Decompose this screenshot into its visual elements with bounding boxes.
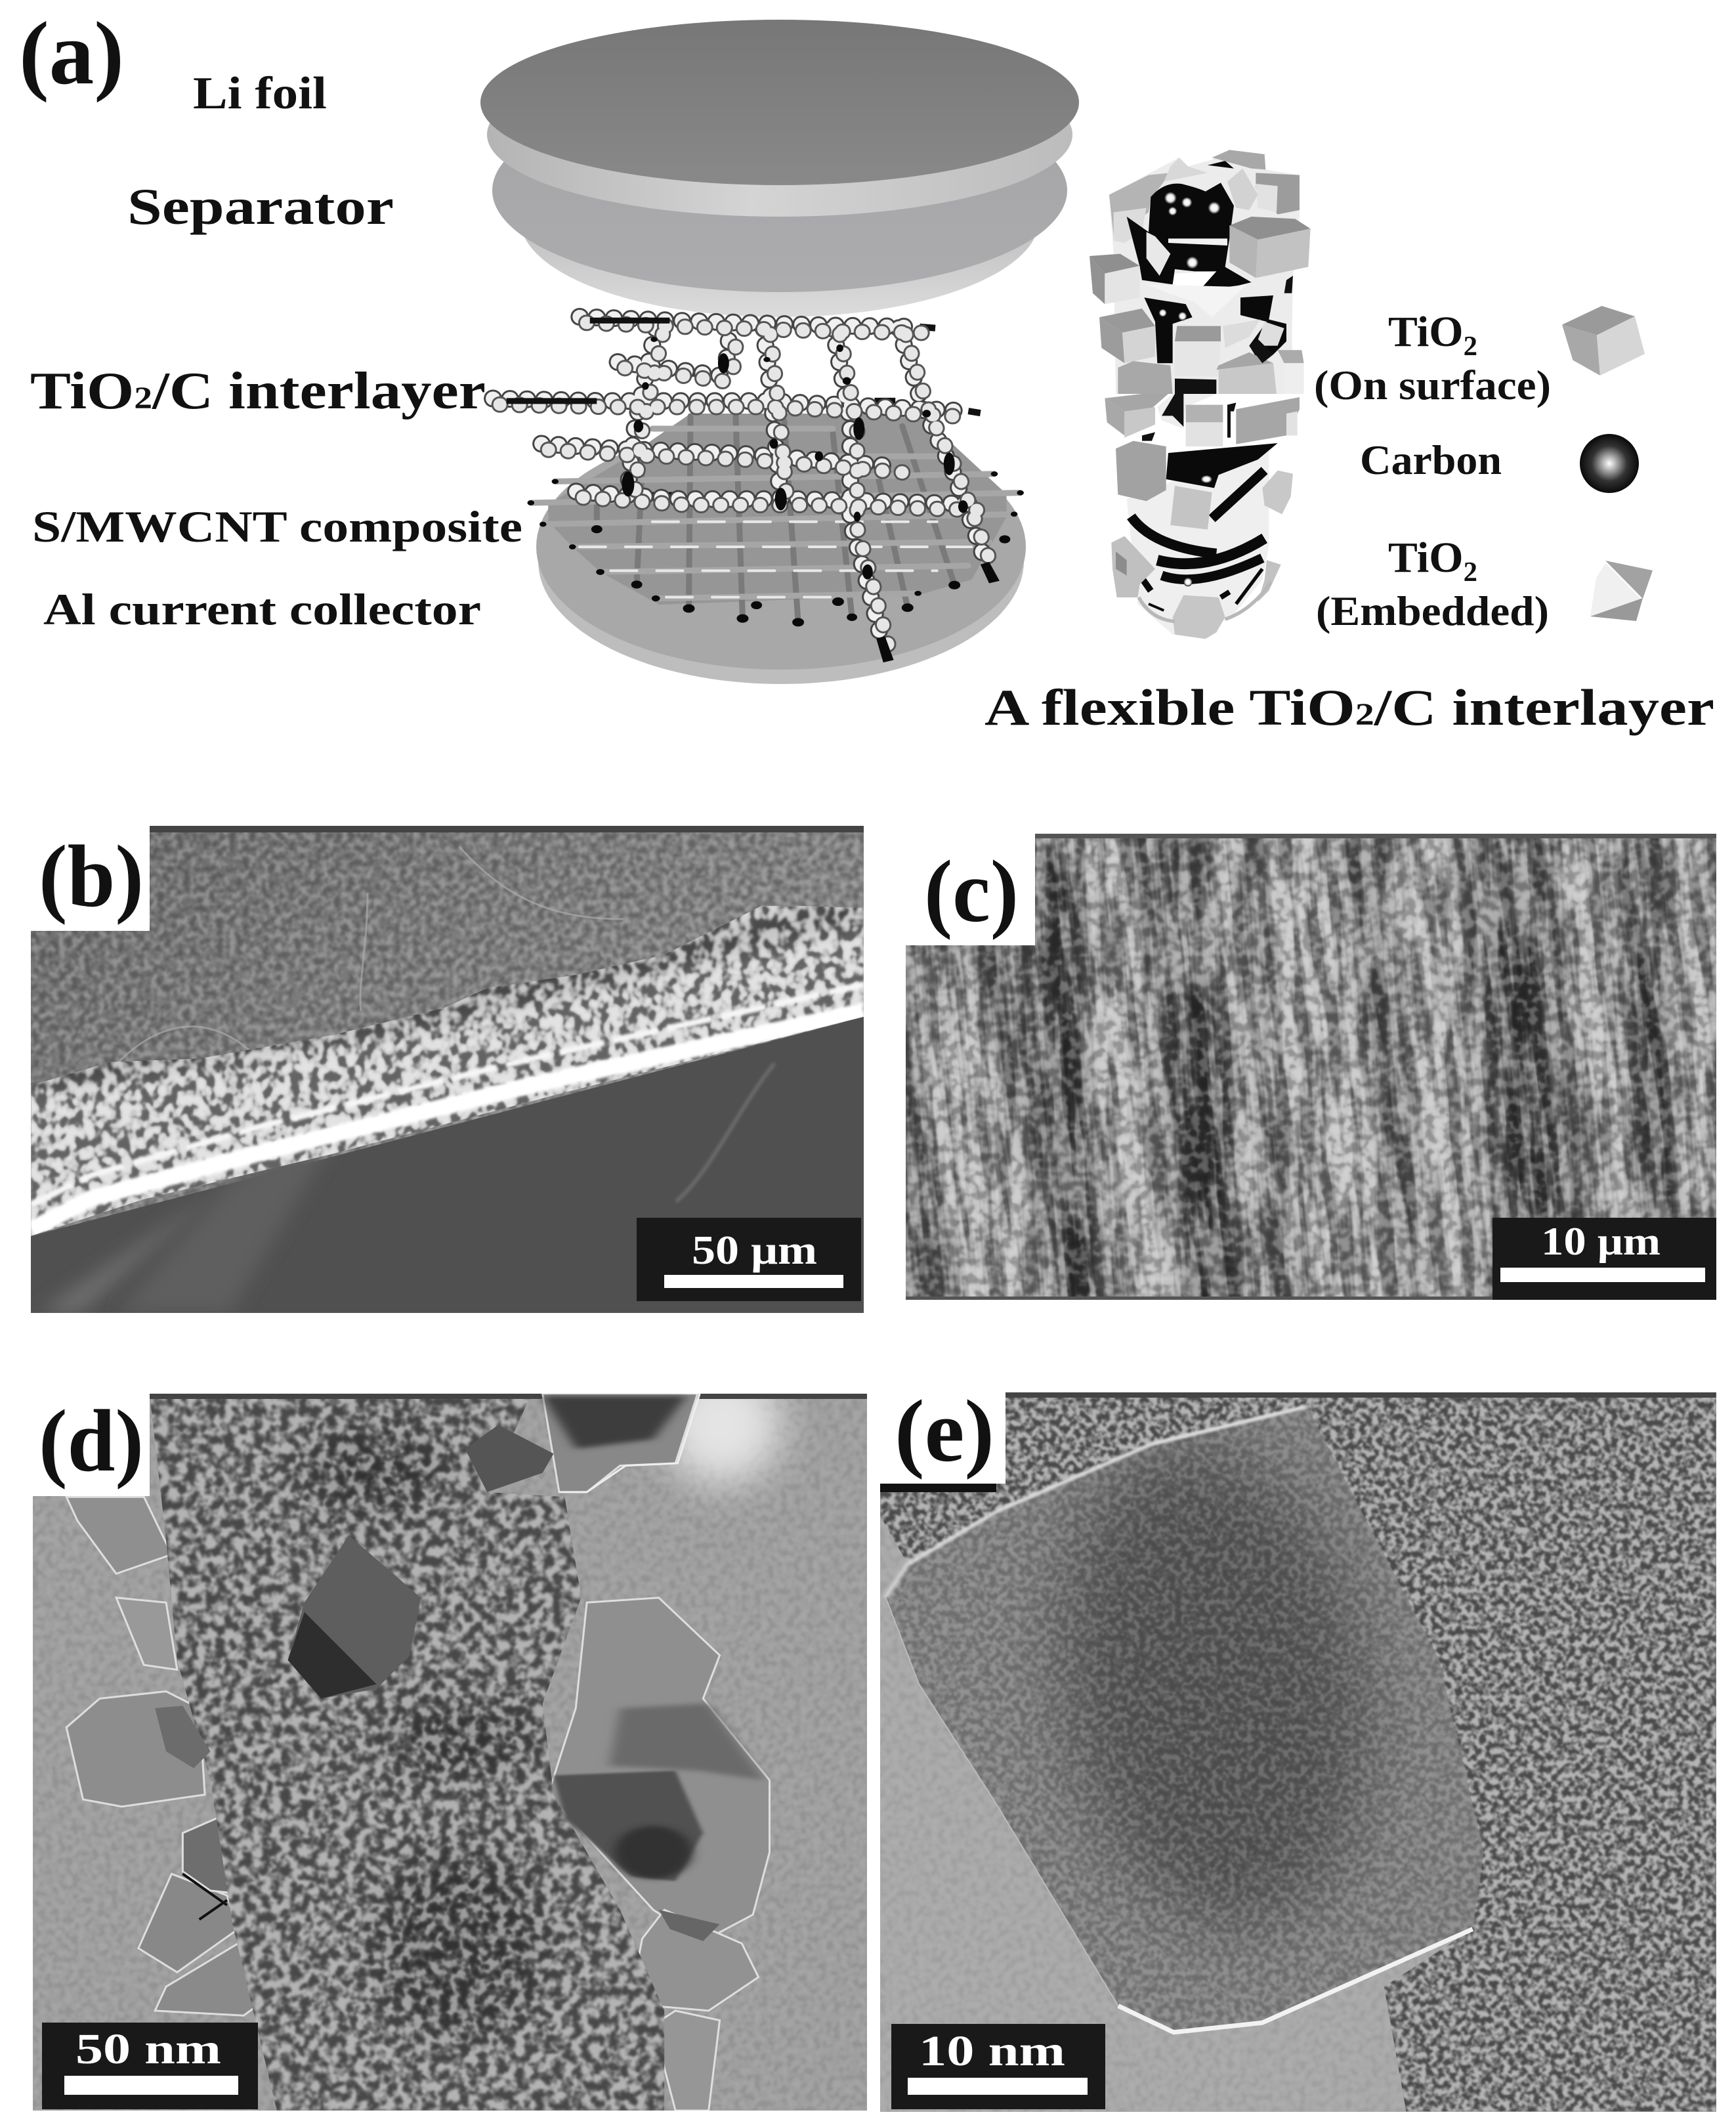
label: Al current collector: Al current collector: [43, 584, 481, 634]
legend: Carbon: Carbon: [1360, 437, 1502, 483]
scale bar: 50 um: 50 μm: [692, 1228, 817, 1273]
separator and Li foil discs: [480, 20, 1079, 317]
S/MWCNT mesh: [527, 414, 1024, 626]
fibre lower section: [1105, 394, 1300, 639]
legend: TiO2 on surface: (On surface): [1314, 362, 1551, 408]
label: S/MWCNT composite: S/MWCNT composite: [32, 502, 522, 551]
scale bar: 10 nm: 10 nm: [919, 2027, 1065, 2075]
label: Li foil: Li foil: [193, 68, 327, 119]
fibre upper section: [1090, 150, 1311, 394]
large cube: [1229, 217, 1311, 278]
surrounding carbon matrix: [880, 1392, 1716, 2112]
scale bar: 50 nm: 50 nm: [75, 2025, 221, 2073]
legend: TiO2 on surface: 2: [1464, 332, 1477, 362]
crystals behind the fibre: [66, 1394, 769, 2111]
legend: TiO2 on surface: [1314, 306, 1645, 408]
scale bar: 10 um: 10 μm: [1541, 1220, 1661, 1263]
panel: (a) battery schematic: [19, 3, 1714, 736]
panel: (d) TEM image: [0, 1365, 867, 2111]
panel: (e) TEM image: [877, 1383, 1716, 2112]
label (c): [902, 828, 1035, 945]
legend: TiO2 embedded: TiO: [1388, 534, 1462, 582]
label: TiO2/C interlayer: TiO 2/C interlayer: [30, 362, 486, 420]
cube: [1175, 326, 1221, 376]
label (d): (d): [39, 1392, 144, 1490]
cube: [1099, 309, 1155, 363]
bright cross-section strip: [31, 906, 864, 1247]
legend: TiO2 embedded: (Embedded): [1316, 588, 1549, 634]
label (b): [0, 821, 150, 931]
legend: TiO2 embedded: [1316, 534, 1653, 634]
panel: (b) SEM image: [0, 821, 864, 1313]
Al current collector disc: [536, 424, 1026, 684]
label (e): (e): [895, 1383, 994, 1480]
scale bar: 50 nm: [42, 2023, 258, 2109]
label (e): [877, 1383, 1006, 1492]
legend: Carbon: [1360, 434, 1639, 493]
scale bar: 10 um: [1493, 1218, 1716, 1300]
scale bar: 50 um: [637, 1218, 861, 1301]
label: Separator: Separator: [127, 178, 394, 235]
TiO2/C interlayer chains: [493, 317, 1000, 662]
label (a): (a): [19, 3, 124, 103]
dark central crystal: [288, 1535, 421, 1698]
caption: A flexible TiO2/C interlayer: A flexible TiO 2/C interlayer: [984, 679, 1714, 736]
top crystals: [465, 1425, 554, 1492]
flexible TiO2/C nanofibre: [1090, 150, 1311, 639]
legend: TiO2 on surface: TiO: [1388, 308, 1462, 356]
carbon fibre: [144, 1394, 683, 2111]
cube: [1090, 254, 1140, 304]
TiO2 crystal: [880, 1392, 1716, 2112]
label (b): (b): [39, 828, 144, 926]
bright crystal edges: [886, 1407, 1473, 2032]
label (c): (c): [924, 843, 1019, 941]
label (d): [0, 1388, 150, 1496]
panel: (c) SEM image: [906, 834, 1716, 1300]
legend: TiO2 embedded: 2: [1464, 557, 1477, 588]
scale bar: 10 nm: [891, 2024, 1105, 2109]
dark inner right crystal: [554, 1771, 703, 1881]
